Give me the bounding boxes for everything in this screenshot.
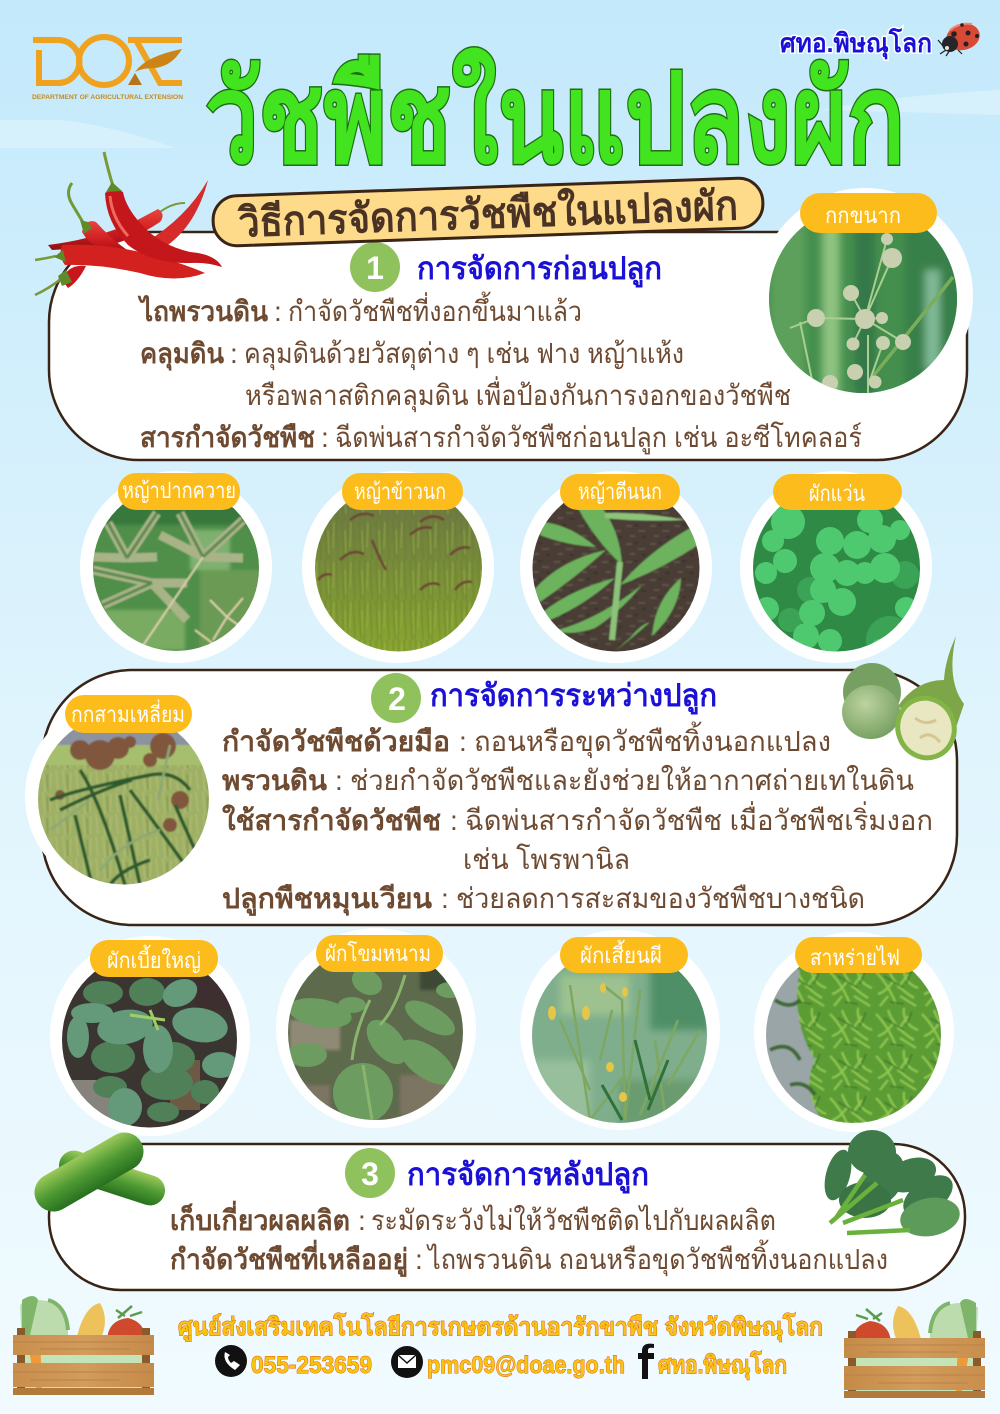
step badge 1: 1 bbox=[366, 250, 384, 286]
photo: spiny amaranth bbox=[276, 928, 476, 1128]
row: weed photos 1 bbox=[80, 471, 932, 664]
illustration: vegetable crate right bbox=[844, 1299, 985, 1398]
illustration: spinach bbox=[820, 1130, 963, 1241]
text: herbicide bbox=[140, 421, 862, 455]
phone number: 055-253659 bbox=[251, 1352, 372, 1379]
subtitle banner: วิธีการจัดการวัชพืชในแปลงผัก bbox=[236, 181, 739, 246]
text: remaining weeds: กำจัดวัชพืชที่เหลืออยู่ bbox=[170, 1239, 408, 1277]
text: harvest: : bbox=[358, 1205, 366, 1236]
illustration: vegetable crate left bbox=[13, 1296, 154, 1395]
icon: mail bbox=[391, 1346, 423, 1378]
photo: goosegrass bbox=[520, 471, 712, 663]
step badge 3: 3 bbox=[361, 1156, 379, 1192]
step badge 2 bbox=[371, 673, 421, 723]
text: tillage: : bbox=[274, 296, 282, 327]
heading: before planting: การจัดการก่อนปลูก bbox=[417, 251, 662, 288]
logo: DOAE: DEPARTMENT OF AGRICULTURAL EXTENSION bbox=[32, 94, 183, 101]
label: water primrose bbox=[560, 937, 688, 973]
step badge 3 bbox=[345, 1148, 395, 1198]
text: hand weeding: กำจัดวัชพืชด้วยมือ bbox=[222, 726, 450, 757]
photo: barnyard grass bbox=[302, 471, 494, 663]
text: herbicide: สารกำจัดวัชพืช bbox=[140, 422, 315, 453]
text: tilling: พรวนดิน bbox=[222, 765, 327, 796]
panel: after planting bbox=[49, 1144, 965, 1290]
text: mulching: หรือพลาสติกคลุมดิน เพื่อป้องกันการงอกของวัชพืช bbox=[245, 376, 791, 413]
label: goosegrass bbox=[560, 474, 680, 510]
label: triangle club-rush: กกสามเหลี่ยม bbox=[71, 699, 185, 727]
text: mulching: คลุมดิน bbox=[140, 338, 224, 371]
label: crowfoot grass: หญ้าปากควาย bbox=[122, 478, 236, 503]
text: herbicide use: เช่น โพรพานิล bbox=[463, 843, 630, 875]
text: crop rotation bbox=[222, 883, 865, 916]
label: water primrose: ผักเสี้ยนผี bbox=[580, 940, 662, 968]
text: tillage bbox=[137, 291, 582, 327]
text: remaining weeds: ไถพรวนดิน ถอนหรือขุดวัชพืชทิ้งนอกแปลง bbox=[426, 1239, 888, 1277]
heading: during planting: การจัดการระหว่างปลูก bbox=[430, 678, 717, 715]
text: tillage: ไถพรวนดิน bbox=[137, 295, 268, 327]
text: tilling: ช่วยกำจัดวัชพืชและยังช่วยให้อากาศถ่ายเทในดิน bbox=[350, 764, 914, 796]
text: mulching bbox=[140, 338, 791, 413]
photo: hydrilla bbox=[754, 932, 954, 1132]
label: crowfoot grass bbox=[118, 473, 240, 510]
photo: triangle club-rush bbox=[25, 695, 219, 893]
label: horse purslane: ผักเบี้ยใหญ่ bbox=[107, 945, 201, 973]
label: water clover: ผักแว่น bbox=[809, 481, 865, 506]
text: crop rotation: ปลูกพืชหมุนเวียน bbox=[222, 883, 432, 916]
step badge 2: 2 bbox=[388, 681, 406, 717]
panel: during planting bbox=[42, 670, 957, 925]
label: kok khanak: กกขนาก bbox=[825, 203, 901, 228]
photo: horse purslane bbox=[50, 936, 250, 1136]
text: hand weeding: : bbox=[459, 726, 467, 757]
text: harvest: เก็บเกี่ยวผลผลิต bbox=[170, 1200, 350, 1236]
label: barnyard grass bbox=[342, 473, 463, 510]
photo: crowfoot grass bbox=[80, 471, 272, 663]
row: weed photos 2 bbox=[50, 928, 954, 1136]
label: horse purslane bbox=[90, 940, 218, 977]
label: kok khanak bbox=[800, 193, 937, 233]
illustration: cucumbers bbox=[28, 1126, 169, 1218]
text: remaining weeds bbox=[170, 1239, 888, 1277]
illustration: red chillies bbox=[35, 152, 222, 295]
text: harvest: ระมัดระวังไม่ให้วัชพืชติดไปกับผลผลิต bbox=[371, 1204, 776, 1236]
icon: facebook bbox=[638, 1344, 654, 1379]
text: hand weeding: ถอนหรือขุดวัชพืชทิ้งนอกแปลง bbox=[474, 721, 831, 759]
text: crop rotation: : bbox=[441, 883, 449, 914]
text: tilling: : bbox=[335, 765, 343, 796]
email: pmc09@doae.go.th bbox=[427, 1352, 625, 1379]
text: remaining weeds: : bbox=[415, 1244, 423, 1275]
photo: water primrose bbox=[520, 930, 720, 1130]
facebook name: ศทอ.พิษณุโลก bbox=[658, 1350, 787, 1381]
text: mulching: : bbox=[230, 338, 238, 369]
text: crop rotation: ช่วยลดการสะสมของวัชพืชบางชนิด bbox=[456, 883, 865, 914]
text: mulching: คลุมดินด้วยวัสดุต่าง ๆ เช่น ฟาง หญ้าแห้ง bbox=[244, 338, 684, 371]
label: water clover bbox=[773, 474, 902, 510]
text: herbicide use: ใช้สารกำจัดวัชพืช bbox=[222, 804, 441, 836]
text: tillage: กำจัดวัชพืชที่งอกขึ้นมาแล้ว bbox=[288, 291, 582, 327]
photo: water clover bbox=[740, 471, 932, 664]
footer: organisation name: ศูนย์ส่งเสริมเทคโนโลยีการเกษตรด้านอารักขาพืช จังหวัดพิษณุโลก bbox=[178, 1312, 823, 1343]
illustration: eggplants bbox=[842, 636, 964, 766]
step badge 1 bbox=[350, 242, 400, 292]
text: herbicide use bbox=[222, 801, 933, 875]
footer: contact row bbox=[215, 1344, 787, 1381]
text: herbicide use: : bbox=[450, 805, 458, 836]
text: harvest bbox=[170, 1200, 776, 1236]
icon: ladybug bbox=[938, 20, 983, 56]
text: herbicide: : bbox=[321, 422, 329, 453]
text: hand weeding bbox=[222, 721, 831, 759]
label: hydrilla: สาหร่ายไฟ bbox=[810, 945, 900, 970]
organisation label: ศทอ.พิษณุโลก bbox=[780, 27, 932, 60]
text: herbicide: ฉีดพ่นสารกำจัดวัชพืชก่อนปลูก เช่น อะซีโทคลอร์ bbox=[335, 421, 862, 455]
photo: kok khanak bbox=[769, 188, 973, 393]
label: goosegrass: หญ้าตีนนก bbox=[578, 479, 662, 504]
label: spiny amaranth: ผักโขมหนาม bbox=[325, 941, 431, 966]
text: herbicide use: ฉีดพ่นสารกำจัดวัชพืช เมื่อวัชพืชเริ่มงอก bbox=[465, 801, 933, 836]
logo: DOAE bbox=[32, 37, 183, 101]
label: barnyard grass: หญ้าข้าวนก bbox=[354, 479, 446, 504]
heading: after planting: การจัดการหลังปลูก bbox=[407, 1157, 649, 1194]
label: hydrilla bbox=[795, 937, 922, 973]
label: triangle club-rush bbox=[65, 695, 192, 733]
panel: before planting bbox=[49, 232, 967, 460]
label: spiny amaranth bbox=[316, 935, 443, 972]
icon: phone bbox=[215, 1345, 247, 1377]
